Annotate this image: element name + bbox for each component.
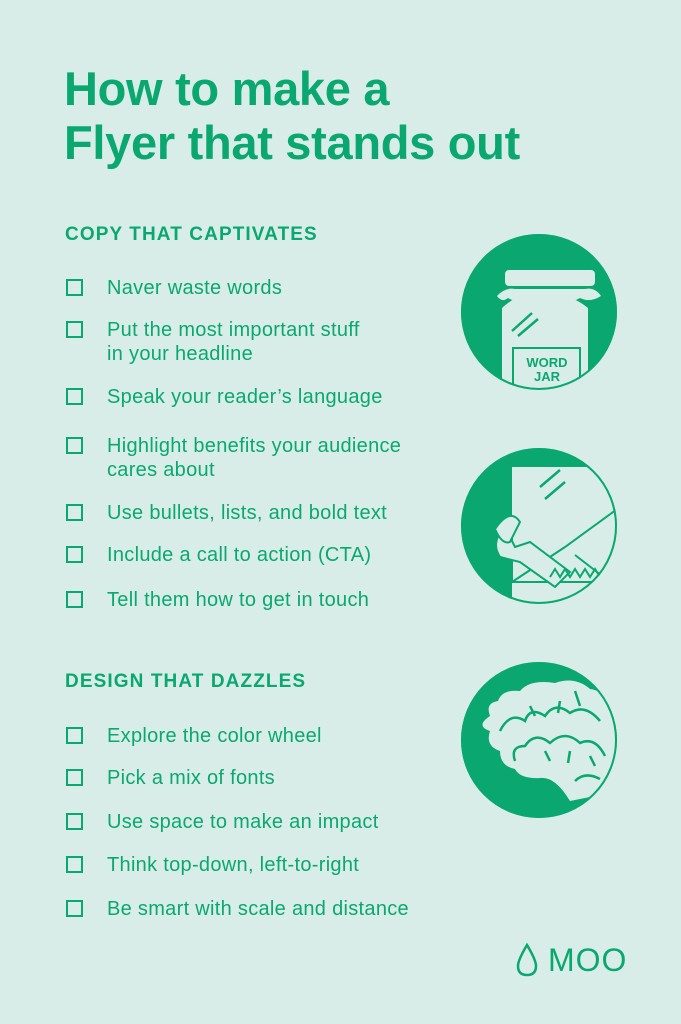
title: How to make a <box>64 62 389 115</box>
title: Flyer that stands out <box>64 116 520 169</box>
icon: brain <box>461 662 617 818</box>
item: in your headline <box>107 343 253 365</box>
item: Use space to make an impact <box>107 811 379 833</box>
item <box>66 319 360 365</box>
item: Use bullets, lists, and bold text <box>107 502 387 524</box>
item: Tell them how to get in touch <box>107 589 369 611</box>
title <box>64 62 520 169</box>
heading: copy: COPY THAT CAPTIVATES <box>65 224 318 245</box>
checklist: design <box>66 725 409 920</box>
item: Explore the color wheel <box>107 725 322 747</box>
icon: phone and envelope <box>461 448 617 604</box>
icon: word jar: WORD <box>526 355 568 370</box>
logo: MOO: MOO <box>548 942 627 978</box>
item: Be smart with scale and distance <box>107 898 409 920</box>
item: Highlight benefits your audience <box>107 435 401 457</box>
item: Pick a mix of fonts <box>107 767 275 789</box>
item: Naver waste words <box>107 277 282 299</box>
checklist: copy <box>66 277 401 611</box>
icon: word jar <box>461 234 617 390</box>
item: Speak your reader’s language <box>107 386 383 408</box>
item: Put the most important stuff <box>107 319 360 341</box>
item: Include a call to action (CTA) <box>107 544 371 566</box>
item: cares about <box>107 459 215 481</box>
item <box>66 435 401 481</box>
heading: design: DESIGN THAT DAZZLES <box>65 671 306 692</box>
icon: word jar: JAR <box>534 369 561 384</box>
item: Think top-down, left-to-right <box>107 854 359 876</box>
